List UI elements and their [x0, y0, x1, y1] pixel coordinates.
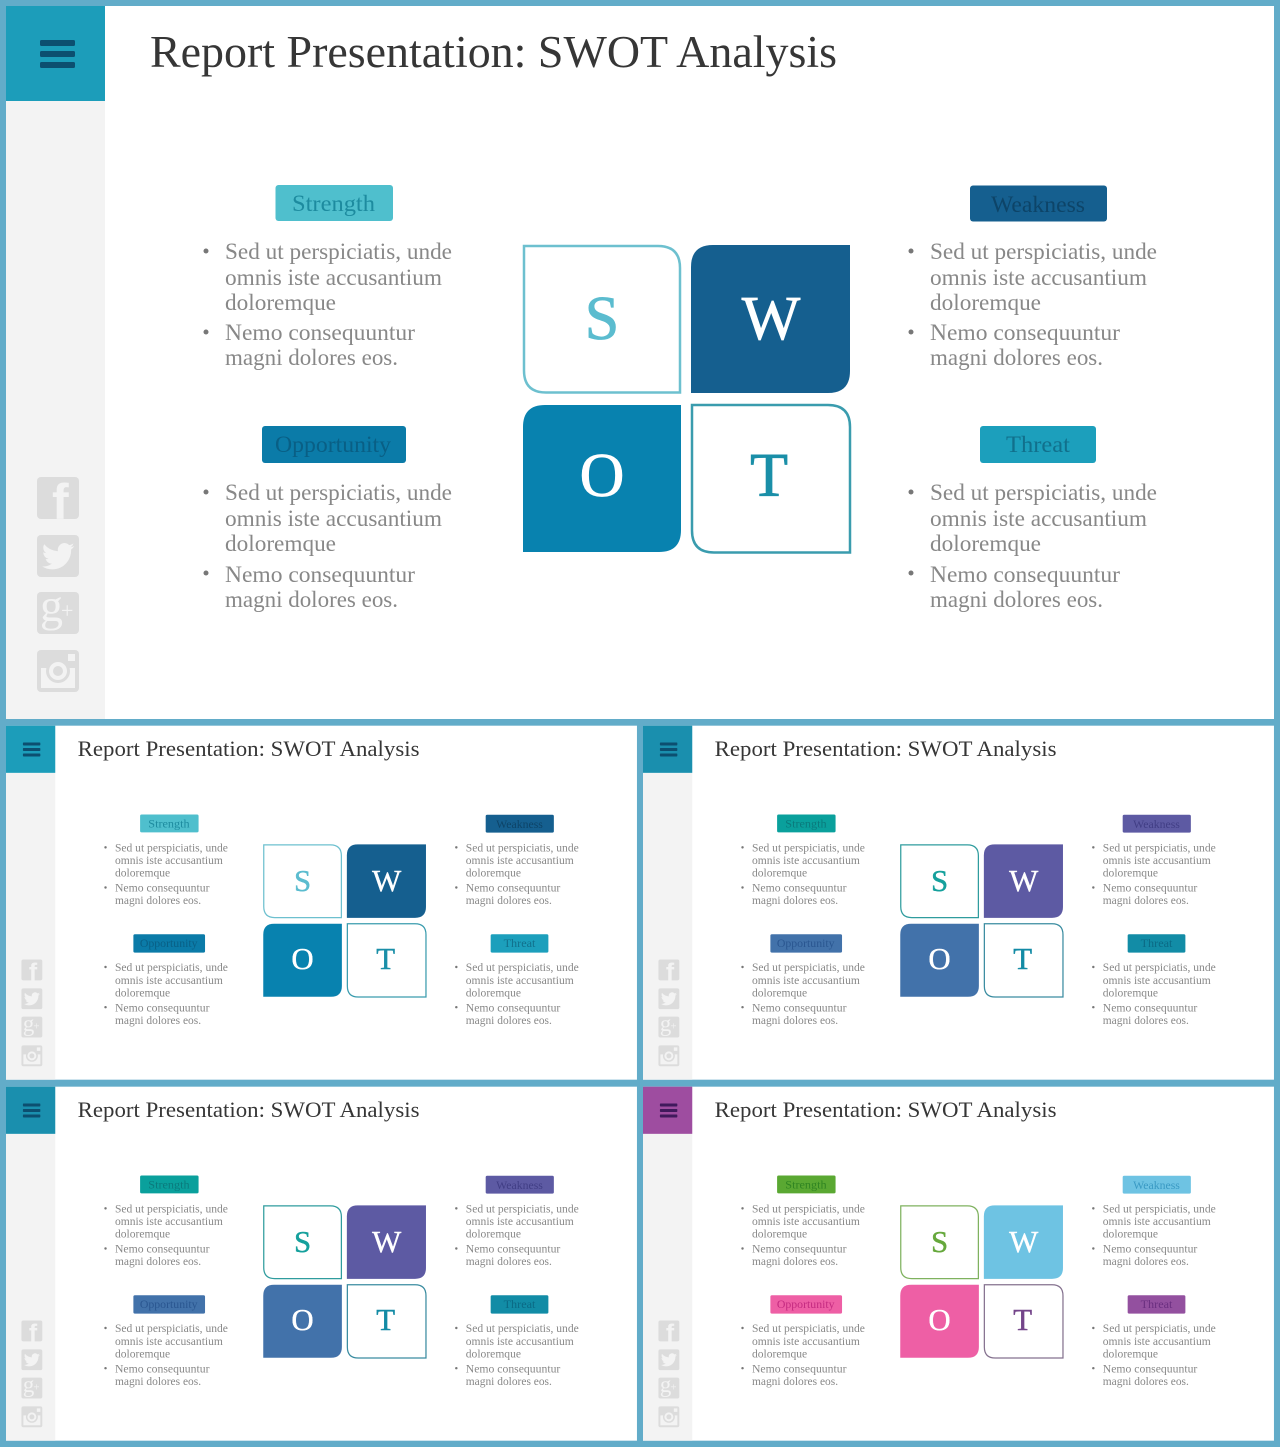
cell: S: S [294, 864, 311, 898]
bullet text: magni dolores eos. [466, 895, 552, 907]
bullet text: Nemo consequuntur [115, 1003, 210, 1015]
slide: main SWOT [6, 6, 1274, 719]
title: Report Presentation: SWOT Analysis [150, 27, 837, 77]
bullet text: omnis iste accusantium [115, 975, 223, 987]
bullet text [455, 1323, 579, 1388]
bullet text: magni dolores eos. [1103, 1015, 1189, 1027]
bullet text: doloremque [115, 868, 170, 880]
bullet text: Nemo consequuntur [1103, 1003, 1198, 1015]
icon: facebook: f [52, 474, 69, 530]
bullet text: magni dolores eos. [1103, 1256, 1189, 1268]
label: opportunity: Opportunity [777, 938, 835, 950]
icon: google plus: + [61, 598, 73, 623]
bullet text: doloremque [115, 987, 170, 999]
cell: O [900, 924, 979, 997]
bullet text: Sed ut perspiciatis, unde [752, 842, 865, 854]
bullet text: Nemo consequuntur [1103, 1244, 1198, 1256]
cell: S: S [931, 864, 948, 898]
bullet text: doloremque [1103, 1229, 1158, 1241]
bullet text: doloremque [1103, 868, 1158, 880]
cell: W [984, 844, 1063, 918]
bullet text: Nemo consequuntur [466, 1244, 561, 1256]
bullet text: Nemo consequuntur [1103, 1364, 1198, 1376]
SWOT matrix [900, 1205, 1063, 1358]
cell: O: O [291, 942, 314, 976]
slide: blue variant, top left [6, 726, 637, 1080]
sidebar [643, 1134, 692, 1441]
bullet text: omnis iste accusantium [115, 1216, 223, 1228]
bullet text: omnis iste accusantium [466, 855, 574, 867]
icon: google plus: + [33, 1382, 40, 1394]
cell: T: T [376, 942, 395, 976]
bullet text [104, 1203, 228, 1268]
label: weakness: Weakness [496, 819, 543, 831]
bullet text [204, 239, 452, 370]
sidebar [6, 101, 105, 719]
menu header block [6, 6, 105, 101]
label: threat: Threat [1141, 1299, 1173, 1311]
bullet text: omnis iste accusantium [466, 1336, 574, 1348]
social icons [21, 959, 42, 1066]
icon: google plus [658, 1011, 679, 1037]
bullet text: Nemo consequuntur [466, 1364, 561, 1376]
icon: google plus: + [33, 1021, 40, 1033]
bullet text: Sed ut perspiciatis, unde [115, 1323, 228, 1335]
bullet text: Nemo consequuntur [225, 320, 415, 345]
SWOT matrix [263, 844, 426, 997]
label: threat: Threat [504, 1299, 536, 1311]
bullet text: omnis iste accusantium [115, 855, 223, 867]
cell: S [524, 246, 680, 392]
icon: google plus: g [660, 1372, 671, 1397]
icon: facebook: f [29, 1320, 38, 1347]
bullet text: doloremque [1103, 1348, 1158, 1360]
cell: W: W [372, 1225, 401, 1259]
bullet text: doloremque [752, 1348, 807, 1360]
bullet text: magni dolores eos. [115, 1376, 201, 1388]
icon: facebook: f [666, 959, 675, 986]
bullet text: Sed ut perspiciatis, unde [1103, 1203, 1216, 1215]
bullet text: omnis iste accusantium [752, 1336, 860, 1348]
icon: google plus: g [23, 1011, 34, 1036]
bullet text: Sed ut perspiciatis, unde [752, 1323, 865, 1335]
social icons [658, 1320, 679, 1427]
bullet text: Sed ut perspiciatis, unde [466, 1203, 579, 1215]
cell: W [984, 1205, 1063, 1279]
cell: W: W [1009, 1225, 1038, 1259]
cell: W: W [372, 864, 401, 898]
bullet text: Sed ut perspiciatis, unde [1103, 842, 1216, 854]
bullet text [104, 842, 228, 907]
bullet text: magni dolores eos. [752, 895, 838, 907]
bullet text: Nemo consequuntur [115, 883, 210, 895]
cell: S: S [931, 1225, 948, 1259]
bullet text: magni dolores eos. [115, 1256, 201, 1268]
bullet text: doloremque [466, 1229, 521, 1241]
cell: T [984, 924, 1063, 997]
social icons [21, 1320, 42, 1427]
panel: opportunity [104, 1295, 228, 1388]
icon: facebook: f [666, 1320, 675, 1347]
menu header block [643, 1087, 692, 1134]
SWOT matrix [900, 844, 1063, 997]
icon: twitter [658, 1349, 679, 1370]
social icons [658, 959, 679, 1066]
bullet text [104, 962, 228, 1027]
bullet text: Nemo consequuntur [225, 562, 415, 587]
icon: google plus: + [670, 1021, 677, 1033]
bullet text: Sed ut perspiciatis, unde [115, 962, 228, 974]
bullet text: Sed ut perspiciatis, unde [1103, 962, 1216, 974]
label: opportunity [262, 426, 406, 463]
cell: O [523, 405, 681, 552]
bullet text: doloremque [930, 531, 1041, 556]
bullet text: Sed ut perspiciatis, unde [466, 962, 579, 974]
icon: instagram [658, 1406, 679, 1427]
label: opportunity: Opportunity [140, 1299, 198, 1311]
label: opportunity: Opportunity [275, 432, 392, 457]
menu header block [6, 726, 55, 773]
cell: S [901, 845, 978, 918]
cell: W [691, 245, 850, 393]
bullet text: Sed ut perspiciatis, unde [930, 480, 1157, 505]
bullet text [1092, 842, 1216, 907]
bullet text: Nemo consequuntur [752, 1003, 847, 1015]
icon: google plus [658, 1372, 679, 1398]
label: threat: Threat [1141, 938, 1173, 950]
title: Report Presentation: SWOT Analysis [78, 736, 420, 761]
panel: opportunity [204, 426, 452, 612]
bullet text: Sed ut perspiciatis, unde [466, 1323, 579, 1335]
icon: google plus: g [40, 580, 63, 631]
cell: W [347, 844, 426, 918]
SWOT matrix [523, 245, 850, 552]
menu header block [643, 726, 692, 773]
bullet text: Sed ut perspiciatis, unde [752, 1203, 865, 1215]
label: weakness: Weakness [1133, 819, 1180, 831]
label: threat: Threat [504, 938, 536, 950]
sidebar [6, 1134, 55, 1441]
panel: weakness [455, 815, 579, 907]
cell: T [984, 1285, 1063, 1358]
panel: weakness [455, 1176, 579, 1268]
bullet text: Nemo consequuntur [752, 1244, 847, 1256]
bullet text: omnis iste accusantium [466, 975, 574, 987]
label: strength: Strength [785, 1179, 827, 1191]
panel: strength [204, 185, 452, 370]
menu header block [6, 1087, 55, 1134]
slide: teal and violet variant, bottom left [6, 1087, 637, 1441]
bullet text: doloremque [752, 987, 807, 999]
bullet text: Sed ut perspiciatis, unde [752, 962, 865, 974]
cell: O: O [580, 442, 624, 510]
bullet text [455, 1203, 579, 1268]
bullet text: magni dolores eos. [1103, 895, 1189, 907]
bullet text: Sed ut perspiciatis, unde [1103, 1323, 1216, 1335]
title: Report Presentation: SWOT Analysis [78, 1097, 420, 1122]
icon: instagram [21, 1045, 42, 1066]
icon: google plus [21, 1011, 42, 1037]
bullet text: Sed ut perspiciatis, unde [466, 842, 579, 854]
slide: teal and violet variant, top right [643, 726, 1274, 1080]
bullet text: omnis iste accusantium [930, 506, 1147, 531]
cell: O: O [928, 942, 951, 976]
cell: S [264, 1206, 341, 1279]
bullet text: doloremque [466, 987, 521, 999]
icon: google plus: + [670, 1382, 677, 1394]
bullet text: magni dolores eos. [930, 587, 1103, 612]
bullet text: magni dolores eos. [225, 345, 398, 370]
cell: O: O [928, 1303, 951, 1337]
title: Report Presentation: SWOT Analysis [715, 736, 1057, 761]
bullet text: Sed ut perspiciatis, unde [115, 1203, 228, 1215]
cell: T [347, 1285, 426, 1358]
bullet text: omnis iste accusantium [1103, 855, 1211, 867]
label: threat [980, 426, 1096, 463]
SWOT matrix [263, 1205, 426, 1358]
cell: T: T [1013, 942, 1032, 976]
sidebar [6, 773, 55, 1080]
bullet text: Nemo consequuntur [930, 562, 1120, 587]
bullet text [104, 1323, 228, 1388]
panel: weakness [908, 186, 1157, 370]
panel: weakness [1092, 1176, 1216, 1268]
label: opportunity: Opportunity [777, 1299, 835, 1311]
bullet text: Nemo consequuntur [466, 883, 561, 895]
sidebar [643, 773, 692, 1080]
cell: T [347, 924, 426, 997]
bullet text: doloremque [115, 1348, 170, 1360]
bullet text [741, 1323, 865, 1388]
panel: threat [1092, 1295, 1216, 1388]
panel: strength [104, 815, 228, 907]
bullet text: omnis iste accusantium [1103, 1216, 1211, 1228]
bullet text: magni dolores eos. [1103, 1376, 1189, 1388]
icon: twitter [658, 988, 679, 1009]
bullet text: omnis iste accusantium [225, 506, 442, 531]
icon: twitter [21, 1349, 42, 1370]
cell: O [900, 1285, 979, 1358]
label: weakness: Weakness [496, 1180, 543, 1192]
icon: instagram [21, 1406, 42, 1427]
icon: twitter [37, 535, 79, 577]
cell: O: O [291, 1303, 314, 1337]
label: strength: Strength [148, 1179, 190, 1191]
bullet text: Sed ut perspiciatis, unde [225, 480, 452, 505]
icon: facebook: f [29, 959, 38, 986]
cell: T: T [376, 1303, 395, 1337]
label: threat: Threat [1006, 432, 1071, 457]
panel: threat [1092, 934, 1216, 1027]
bullet text: doloremque [466, 868, 521, 880]
label: weakness [970, 186, 1107, 222]
bullet text: magni dolores eos. [115, 1015, 201, 1027]
bullet text [455, 842, 579, 907]
bullet text: doloremque [1103, 987, 1158, 999]
bullet text: Nemo consequuntur [752, 1364, 847, 1376]
bullet text: doloremque [115, 1229, 170, 1241]
bullet text: omnis iste accusantium [115, 1336, 223, 1348]
panel: threat [908, 426, 1157, 612]
bullet text: omnis iste accusantium [752, 1216, 860, 1228]
bullet text: Sed ut perspiciatis, unde [930, 239, 1157, 264]
bullet text: omnis iste accusantium [225, 265, 442, 290]
bullet text: magni dolores eos. [466, 1015, 552, 1027]
bullet text [1092, 1203, 1216, 1268]
bullet text: magni dolores eos. [752, 1256, 838, 1268]
bullet text: omnis iste accusantium [930, 265, 1147, 290]
bullet text: omnis iste accusantium [752, 855, 860, 867]
bullet text: doloremque [466, 1348, 521, 1360]
bullet text: magni dolores eos. [466, 1256, 552, 1268]
icon: twitter [21, 988, 42, 1009]
icon: google plus [21, 1372, 42, 1398]
bullet text: doloremque [752, 1229, 807, 1241]
bullet text: omnis iste accusantium [466, 1216, 574, 1228]
cell: T [692, 405, 850, 552]
bullet text: omnis iste accusantium [752, 975, 860, 987]
bullet text: magni dolores eos. [752, 1015, 838, 1027]
bullet text: Nemo consequuntur [466, 1003, 561, 1015]
bullet text [908, 239, 1157, 370]
bullet text: Nemo consequuntur [115, 1364, 210, 1376]
bullet text: doloremque [930, 290, 1041, 315]
panel: strength [741, 815, 865, 907]
panel: weakness [1092, 815, 1216, 907]
cell: T: T [1013, 1303, 1032, 1337]
label: strength: Strength [785, 818, 827, 830]
cell: O [263, 1285, 342, 1358]
label: weakness: Weakness [991, 192, 1085, 217]
panel: threat [455, 934, 579, 1027]
panel: opportunity [104, 934, 228, 1027]
cell: W: W [1009, 864, 1038, 898]
bullet text: magni dolores eos. [466, 1376, 552, 1388]
bullet text: Nemo consequuntur [752, 883, 847, 895]
label: strength: Strength [148, 818, 190, 830]
label: strength [276, 185, 393, 221]
icon: google plus [37, 580, 79, 634]
cell: S: S [585, 285, 619, 353]
cell: O [263, 924, 342, 997]
bullet text: Nemo consequuntur [115, 1244, 210, 1256]
title: Report Presentation: SWOT Analysis [715, 1097, 1057, 1122]
bullet text [741, 962, 865, 1027]
label: weakness: Weakness [1133, 1180, 1180, 1192]
icon: google plus: g [660, 1011, 671, 1036]
icon: facebook [37, 474, 79, 530]
bullet text: doloremque [752, 868, 807, 880]
slide: green and pink variant, bottom right [643, 1087, 1274, 1441]
bullet text: magni dolores eos. [752, 1376, 838, 1388]
bullet text: Nemo consequuntur [930, 320, 1120, 345]
bullet text [741, 1203, 865, 1268]
panel: threat [455, 1295, 579, 1388]
bullet text: omnis iste accusantium [1103, 975, 1211, 987]
bullet text [204, 480, 452, 612]
bullet text [1092, 962, 1216, 1027]
icon: instagram [37, 650, 79, 692]
bullet text: doloremque [225, 290, 336, 315]
bullet text [455, 962, 579, 1027]
icon: instagram [658, 1045, 679, 1066]
cell: W [347, 1205, 426, 1279]
label: strength: Strength [292, 191, 376, 216]
bullet text: magni dolores eos. [225, 587, 398, 612]
bullet text [908, 480, 1157, 612]
bullet text: Sed ut perspiciatis, unde [115, 842, 228, 854]
cell: S: S [294, 1225, 311, 1259]
social icons [37, 474, 79, 692]
label: opportunity: Opportunity [140, 938, 198, 950]
cell: W: W [742, 285, 801, 353]
bullet text [741, 842, 865, 907]
bullet text: Nemo consequuntur [1103, 883, 1198, 895]
cell: S [901, 1206, 978, 1279]
bullet text: doloremque [225, 531, 336, 556]
panel: opportunity [741, 934, 865, 1027]
bullet text: magni dolores eos. [930, 345, 1103, 370]
panel: strength [104, 1176, 228, 1268]
panel: strength [741, 1176, 865, 1268]
cell: S [264, 845, 341, 918]
bullet text [1092, 1323, 1216, 1388]
bullet text: omnis iste accusantium [1103, 1336, 1211, 1348]
bullet text: magni dolores eos. [115, 895, 201, 907]
bullet text: Sed ut perspiciatis, unde [225, 239, 452, 264]
cell: T: T [750, 442, 788, 510]
panel: opportunity [741, 1295, 865, 1388]
icon: google plus: g [23, 1372, 34, 1397]
